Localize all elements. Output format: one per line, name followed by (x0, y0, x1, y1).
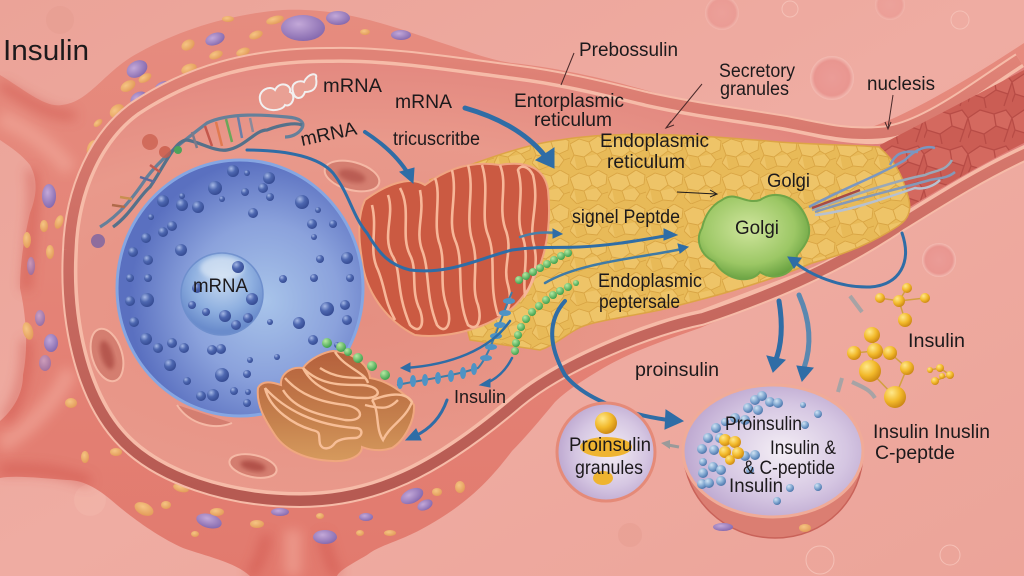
DNA helix (91, 115, 303, 248)
labels: granules (720, 79, 789, 100)
labels: proinsulin (635, 360, 719, 381)
blue peptide chain (397, 292, 515, 389)
labels: Insulin Inuslin (873, 422, 990, 443)
arrow: chain back left (401, 321, 510, 372)
wall organelles: purple and orange vesicles (21, 11, 465, 544)
labels: tricuscritbe (393, 129, 480, 150)
arrow: into mitochondrion (365, 132, 414, 183)
red blood cells in cytoplasm (85, 155, 383, 482)
labels: reticulum (607, 152, 685, 173)
labels: mRNA (395, 92, 452, 113)
labels in large vesicle: & C-peptide (743, 458, 835, 479)
arrow: long mRNA path to golgi (247, 150, 677, 271)
labels in large vesicle: Proinsulin (725, 414, 802, 435)
arrow: short to signal peptide (520, 229, 562, 238)
labels in granule: Proinsulin (569, 435, 651, 456)
labels: Golgi (767, 171, 810, 192)
arrows (247, 108, 905, 440)
insulin gold molecules (838, 283, 954, 408)
labels: Entorplasmic (514, 91, 624, 112)
labels in granule (569, 435, 651, 479)
golgi apparatus (brown) (258, 351, 414, 461)
labels: Endoplasmic (598, 271, 702, 292)
labels in large vesicle: Insulin (729, 476, 783, 497)
ribosome cloud near mRNA (260, 74, 316, 110)
arrow: first down arrow (767, 301, 785, 372)
labels in granule: granules (575, 458, 643, 479)
nucleus (117, 160, 363, 416)
labels: mRNA (323, 76, 382, 97)
arrow: lower strand to golgi (545, 244, 688, 283)
arrow: reticulum to vesicle (552, 301, 683, 429)
labels: Endoplasmic (600, 131, 709, 152)
labels: signel Peptde (572, 207, 680, 228)
wall shading (0, 118, 293, 576)
labels: Golgi (735, 218, 779, 239)
pointer lines (561, 53, 893, 197)
labels (299, 40, 990, 464)
large vesicle (683, 385, 863, 538)
labels: Insulin (454, 387, 506, 407)
green bead chains (322, 249, 579, 380)
green golgi (699, 195, 809, 279)
proinsulin granule vesicle (557, 403, 655, 501)
endoplasmic reticulum (430, 134, 910, 350)
mitochondrion (359, 164, 549, 336)
arrow: return to golgi (788, 233, 905, 287)
filaments from golgi (809, 147, 955, 215)
label: mRNA in nucleolus: mRNA (193, 276, 248, 297)
labels: Insulin (908, 331, 965, 352)
labels: peptersale (599, 292, 680, 313)
labels in large vesicle (725, 414, 836, 497)
labels: Prebossulin (579, 40, 678, 61)
arrow: insulin to golgi (406, 400, 447, 440)
labels: Secretory (719, 61, 795, 82)
labels: nuclesis (867, 74, 935, 95)
membrane bands and cytoplasm (77, 63, 1024, 492)
title: Insulin (3, 35, 89, 67)
arrow: lower chain back (480, 358, 512, 387)
arrow: second down arrow (797, 295, 813, 381)
labels in large vesicle: Insulin & (770, 438, 836, 459)
arrow: into reticulum (465, 108, 554, 168)
gray arrow between vesicles (661, 440, 679, 449)
labels: reticulum (534, 110, 612, 131)
nucleolus (181, 253, 263, 335)
labels: C-peptde (875, 443, 955, 464)
labels: mRNA (299, 118, 359, 151)
